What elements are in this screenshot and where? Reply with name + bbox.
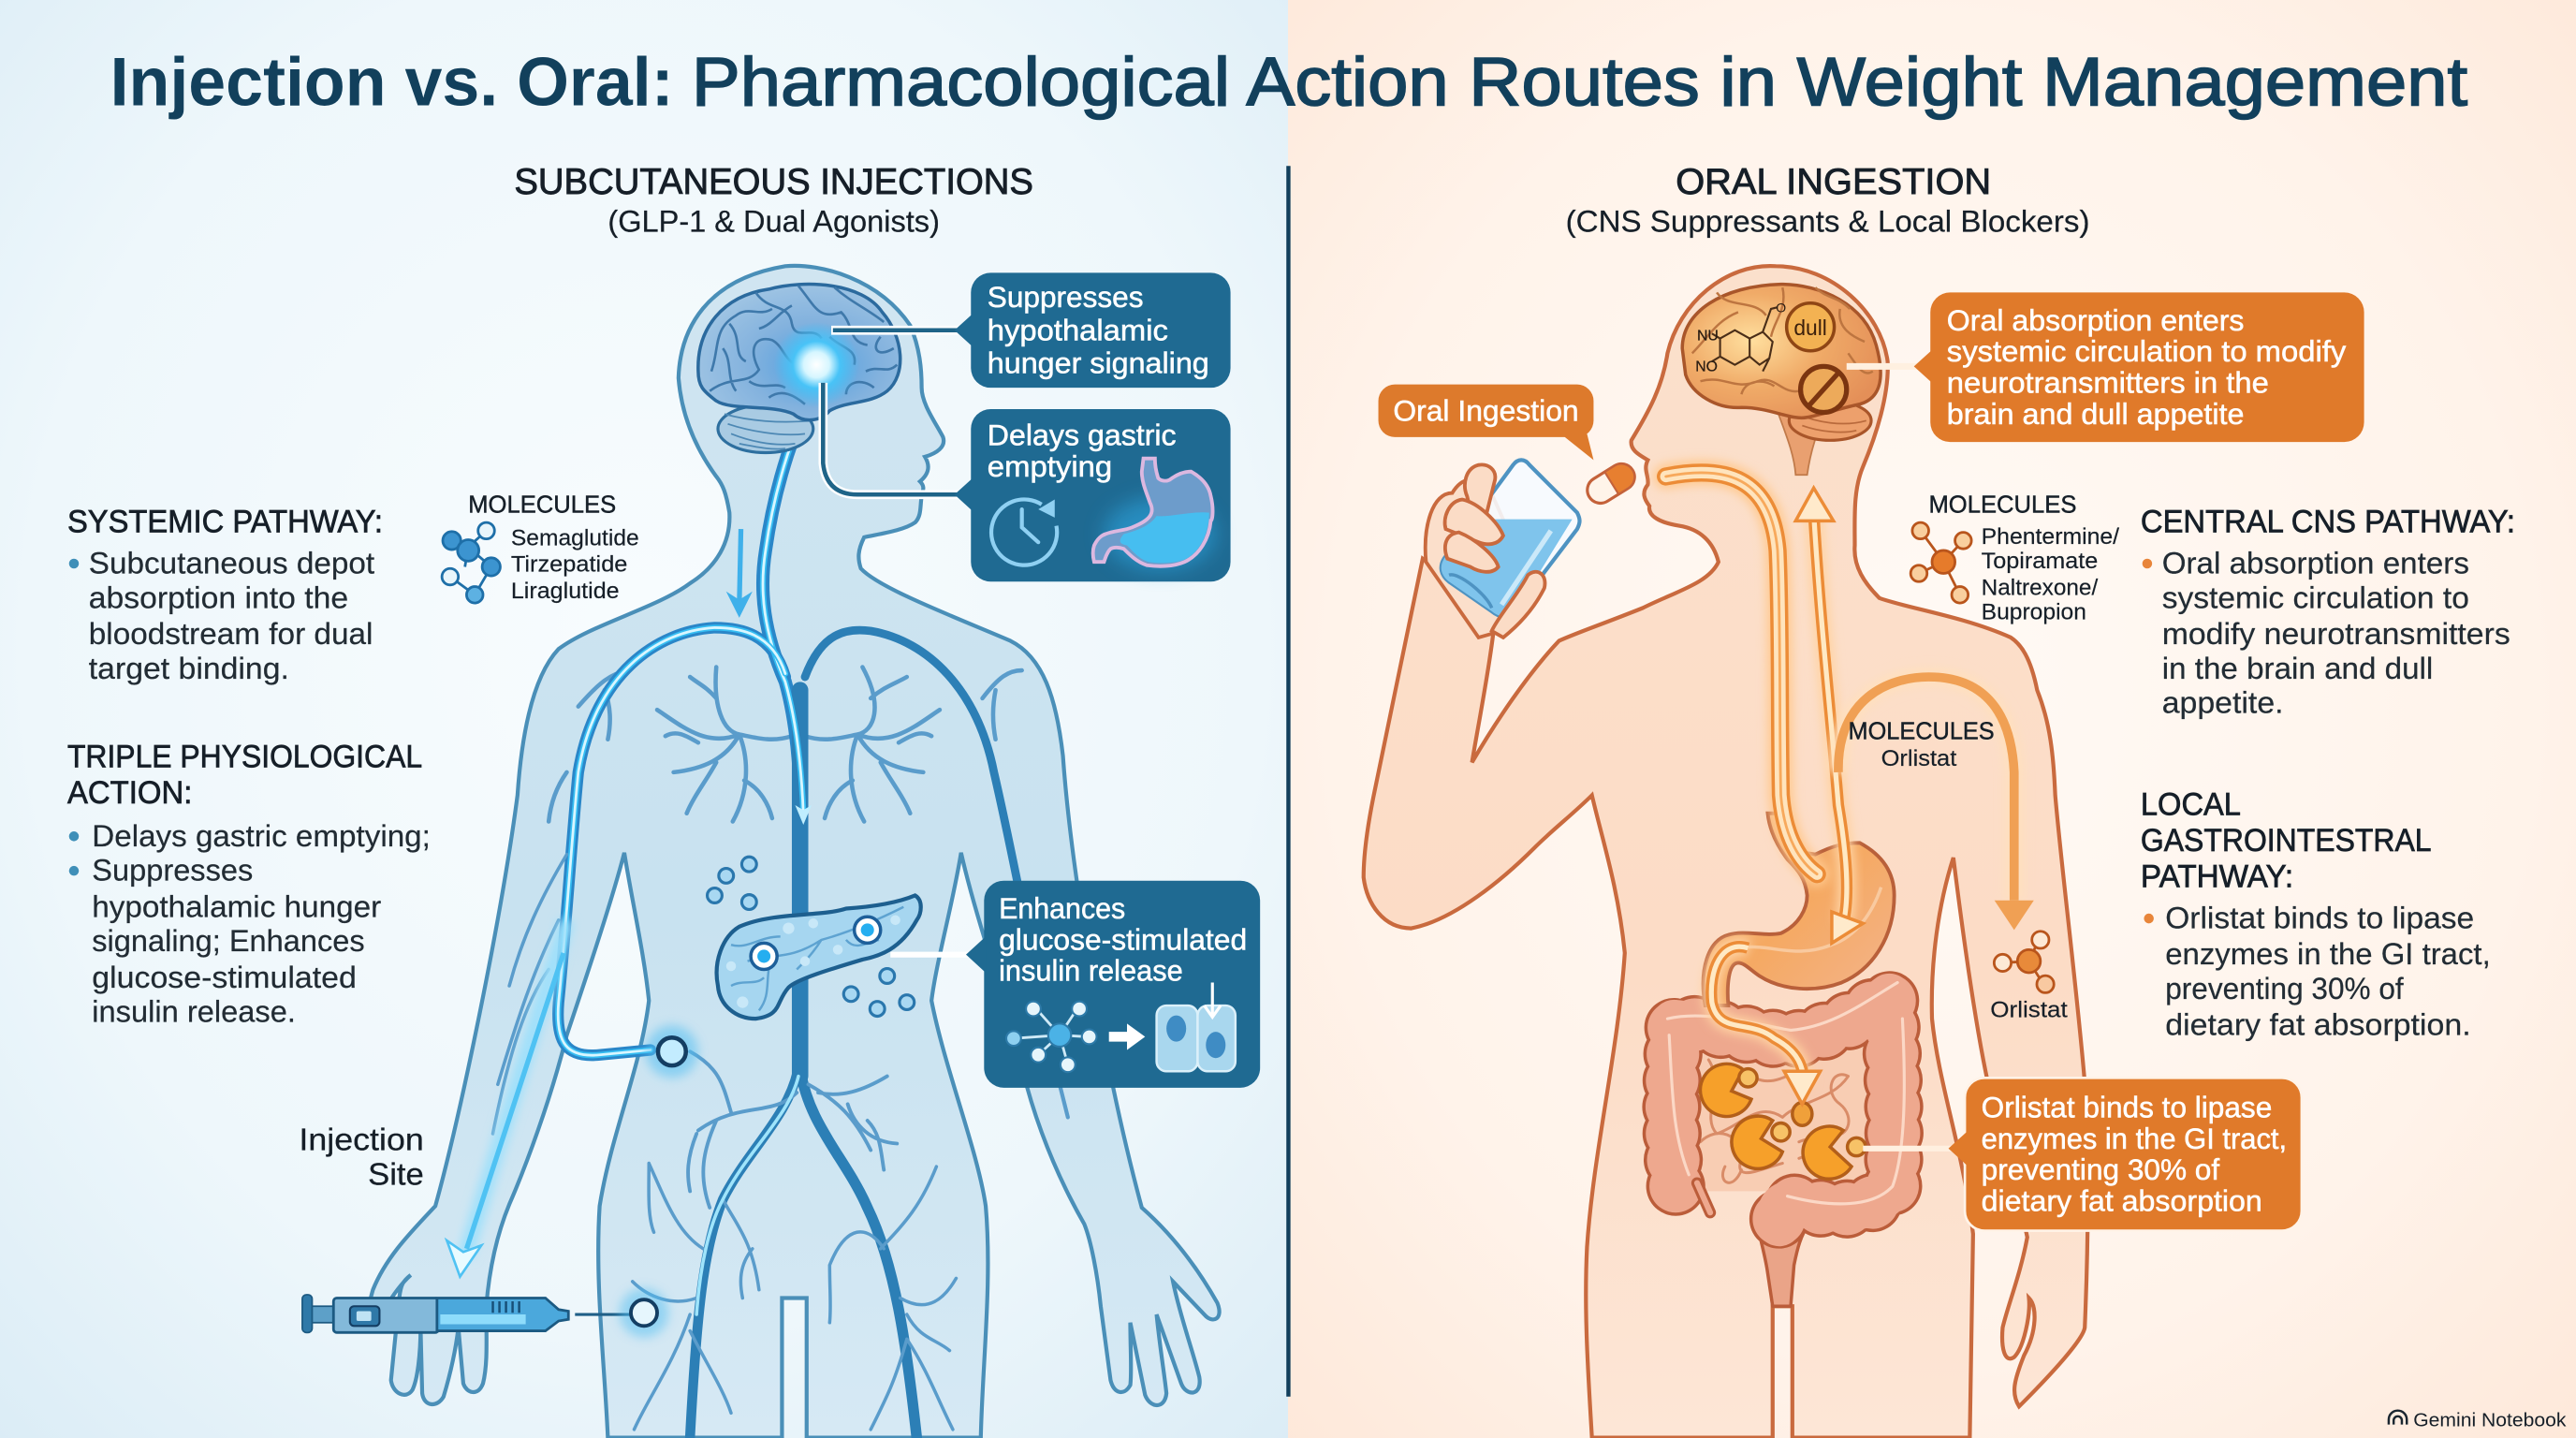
callout: enhances insulin release: Enhances — [999, 891, 1125, 925]
molecules: oral CNS: Topiramate — [1982, 550, 2098, 574]
text block: central CNS pathway: CENTRAL CNS PATHWAY: — [2141, 505, 2515, 540]
bright signal path: arch — [558, 627, 785, 1055]
callout: delays gastric emptying: Delays gastric — [988, 418, 1177, 452]
callout: CNS absorption: systemic circulation to modify — [1947, 334, 2347, 368]
text block: systemic pathway: target binding. — [89, 652, 289, 685]
brain: orange: NO — [1695, 360, 1718, 375]
panel: subcutaneous injections — [67, 162, 1260, 1438]
molecules: injection: MOLECULES — [468, 491, 616, 519]
brain: blue — [698, 285, 900, 453]
fingers on glass — [1445, 464, 1544, 638]
callout: orlistat lipase: enzymes in the GI tract, — [1982, 1122, 2287, 1155]
injection site label — [299, 1123, 424, 1192]
heading: subcutaneous injections: (GLP-1 & Dual Agonists) — [607, 204, 940, 238]
GI pathway arrow: mouth to gut — [1666, 473, 1817, 874]
text block: local gastrointestinal pathway: preventing 30% of — [2165, 972, 2405, 1005]
icon: stomach — [1093, 459, 1216, 570]
heading: subcutaneous injections: SUBCUTANEOUS INJECTIONS — [514, 162, 1033, 202]
text block: local gastrointestinal pathway: enzymes in the GI tract, — [2165, 937, 2491, 971]
body silhouette: oral figure — [1364, 266, 2088, 1438]
molecules: orlistat label: Orlistat — [1881, 747, 1957, 771]
text block: central CNS pathway — [2141, 505, 2515, 720]
esophagus and stomach — [1704, 814, 1895, 1005]
icon: prohibition — [1801, 366, 1847, 413]
background: injection side — [0, 0, 1288, 1438]
GI pathway arrow: through intestine — [1711, 946, 1821, 1104]
bright signal path: neck — [763, 381, 816, 814]
watermark: Gemini Notebook — [2413, 1410, 2567, 1431]
injection site label: Site — [368, 1157, 424, 1192]
callout: hypothalamic hunger: hypothalamic — [988, 313, 1168, 346]
brain: orange: NU — [1697, 328, 1719, 344]
molecules: orlistat label: MOLECULES — [1848, 717, 1995, 745]
thigh branches — [633, 1164, 956, 1430]
connector: brain to callout — [831, 328, 973, 333]
text block: triple physiological action — [67, 740, 431, 1029]
icon: molecule network — [1006, 1002, 1097, 1072]
injection pen — [302, 1288, 668, 1338]
callout: enhances insulin release: insulin release — [999, 954, 1183, 988]
text block: triple physiological action: Suppresses — [92, 854, 253, 888]
brain: orange — [1682, 285, 1881, 475]
rectum — [1756, 1204, 1808, 1306]
callout: orlistat lipase: preventing 30% of — [1982, 1152, 2219, 1186]
arrow: descending trunk — [795, 805, 812, 825]
molecules: injection: Tirzepatide — [511, 553, 627, 578]
text block: local gastrointestinal pathway: PATHWAY: — [2141, 859, 2293, 895]
title: Pharmacological Action Routes in Weight Management — [692, 42, 2467, 120]
text block: triple physiological action: glucose-stimulated — [92, 961, 357, 994]
text block: central CNS pathway: systemic circulation to — [2162, 580, 2469, 614]
icon: dull badge: dull — [1793, 315, 1827, 340]
bright signal path: leg — [696, 1077, 798, 1314]
molecules: injection: Liraglutide — [511, 580, 620, 604]
molecules: injection — [442, 491, 639, 604]
text block: central CNS pathway: in the brain and dull — [2162, 652, 2433, 685]
callout: hypothalamic hunger: Suppresses — [988, 280, 1144, 314]
callout: orlistat lipase: dietary fat absorption — [1982, 1183, 2262, 1217]
callout: CNS absorption — [1914, 292, 2364, 442]
callout: CNS absorption: brain and dull appetite — [1947, 397, 2244, 431]
arrow: descending from neck — [726, 529, 753, 618]
icon: beta cells — [1157, 983, 1236, 1071]
brain: orange: O — [1776, 300, 1786, 315]
text block: systemic pathway: absorption into the — [89, 580, 348, 614]
GI pathway arrow: branch to Orlistat — [1838, 677, 2034, 930]
callout: orlistat lipase: Orlistat binds to lipase — [1982, 1090, 2272, 1123]
left pulmonary arch — [558, 627, 785, 1055]
callout: CNS absorption: Oral absorption enters — [1947, 303, 2244, 337]
text block: local gastrointestinal pathway: LOCAL — [2141, 786, 2241, 822]
molecules: injection: Semaglutide — [511, 527, 639, 551]
GI pathway arrow: up to brain and down to stomach — [1795, 488, 1863, 943]
title: Injection vs. Oral: — [110, 42, 674, 120]
molecules: oral CNS: Phentermine/ — [1982, 525, 2120, 550]
body silhouette: injection figure — [368, 266, 1220, 1438]
lung tree: right — [805, 668, 1022, 822]
pancreas — [717, 895, 921, 1019]
molecules near pancreas — [708, 857, 915, 1016]
main trunk — [796, 690, 805, 1077]
leg arteries — [690, 1068, 798, 1438]
heading: subcutaneous injections — [514, 162, 1033, 238]
callout: oral ingestion — [1379, 385, 1593, 460]
hand holding glass: palm — [1426, 479, 1528, 638]
text block: systemic pathway: bloodstream for dual — [89, 617, 373, 651]
heading: oral ingestion — [1566, 162, 2089, 238]
icon: molecule cluster — [442, 522, 500, 603]
callout: enhances insulin release — [966, 881, 1260, 1088]
text block: triple physiological action: signaling; Enhances — [92, 924, 365, 958]
text block: local gastrointestinal pathway: dietary fat absorption. — [2165, 1008, 2471, 1042]
callout: hypothalamic hunger — [955, 272, 1231, 388]
small intestine loops — [1701, 1060, 1849, 1182]
connector: enzyme to callout — [1863, 1147, 1962, 1151]
text block: triple physiological action: insulin release. — [92, 995, 296, 1029]
heading: oral ingestion: (CNS Suppressants & Local Blockers) — [1566, 204, 2089, 238]
injection depot site marker — [646, 1025, 698, 1078]
molecules: oral CNS — [1910, 491, 2120, 625]
callout: delays gastric emptying — [955, 409, 1231, 581]
glass of water — [1442, 460, 1580, 616]
large intestine — [1667, 983, 1904, 1306]
molecules: oral CNS: Bupropion — [1982, 601, 2086, 625]
icon: arrow — [1109, 1023, 1145, 1049]
text block: systemic pathway — [67, 505, 383, 685]
text block: triple physiological action: ACTION: — [67, 775, 192, 811]
injection site label: Injection — [299, 1123, 424, 1158]
callout: delays gastric emptying: emptying — [988, 449, 1112, 483]
callout: oral ingestion: Oral Ingestion — [1393, 393, 1579, 427]
molecule: orlistat — [1990, 932, 2068, 1022]
background: oral side — [1288, 0, 2576, 1438]
text block: central CNS pathway: modify neurotransmitters — [2162, 617, 2510, 651]
abdominal branches — [688, 1051, 897, 1208]
text block: central CNS pathway: appetite. — [2162, 686, 2284, 720]
callout: CNS absorption: neurotransmitters in the — [1947, 365, 2269, 399]
pill — [1582, 459, 1640, 508]
icon: chemical structure — [1712, 307, 1778, 372]
text block: systemic pathway: Subcutaneous depot — [89, 547, 374, 580]
heading: oral ingestion: ORAL INGESTION — [1676, 162, 1991, 202]
right pulmonary arch — [805, 630, 1029, 936]
callout: orlistat lipase — [1949, 1078, 2302, 1231]
text block: triple physiological action: Delays gastric emptying; — [92, 819, 431, 853]
text block: local gastrointestinal pathway: Orlistat binds to lipase — [2165, 902, 2474, 935]
injection pathway arrow: down arm — [446, 920, 567, 1277]
text block: systemic pathway: SYSTEMIC PATHWAY: — [67, 505, 383, 540]
neck artery — [763, 381, 816, 805]
callout: enhances insulin release: glucose-stimulated — [999, 922, 1247, 956]
icon: clock — [991, 499, 1057, 565]
molecules: oral CNS: MOLECULES — [1928, 491, 2076, 519]
text block: triple physiological action: hypothalamic hunger — [92, 889, 381, 923]
arm branches — [493, 855, 567, 1134]
text block: local gastrointestinal pathway — [2141, 786, 2491, 1042]
receptor sites — [751, 917, 881, 969]
molecule: orlistat: Orlistat — [1990, 998, 2068, 1022]
molecules: orlistat label — [1848, 717, 1995, 771]
lung tree: left — [549, 668, 792, 822]
vascular system — [493, 381, 1068, 1438]
center divider — [1286, 166, 1291, 1397]
molecules: oral CNS: Naltrexone/ — [1982, 576, 2099, 600]
text block: triple physiological action: TRIPLE PHYSIOLOGICAL — [67, 740, 422, 775]
callout: hypothalamic hunger: hunger signaling — [988, 345, 1209, 379]
panel: oral ingestion — [1364, 162, 2515, 1438]
appendix — [1697, 1183, 1710, 1212]
connector: pancreas to callout — [890, 953, 970, 956]
text block: central CNS pathway: Oral absorption enters — [2162, 547, 2469, 580]
connector: brain to stomach callout — [823, 383, 973, 494]
icon: molecule — [1910, 522, 1971, 603]
lipase enzymes — [1701, 1064, 1866, 1179]
icon: dull badge — [1787, 303, 1835, 351]
callout connector: brain — [1847, 364, 1932, 368]
text block: local gastrointestinal pathway: GASTROINTESTRAL — [2141, 823, 2432, 858]
